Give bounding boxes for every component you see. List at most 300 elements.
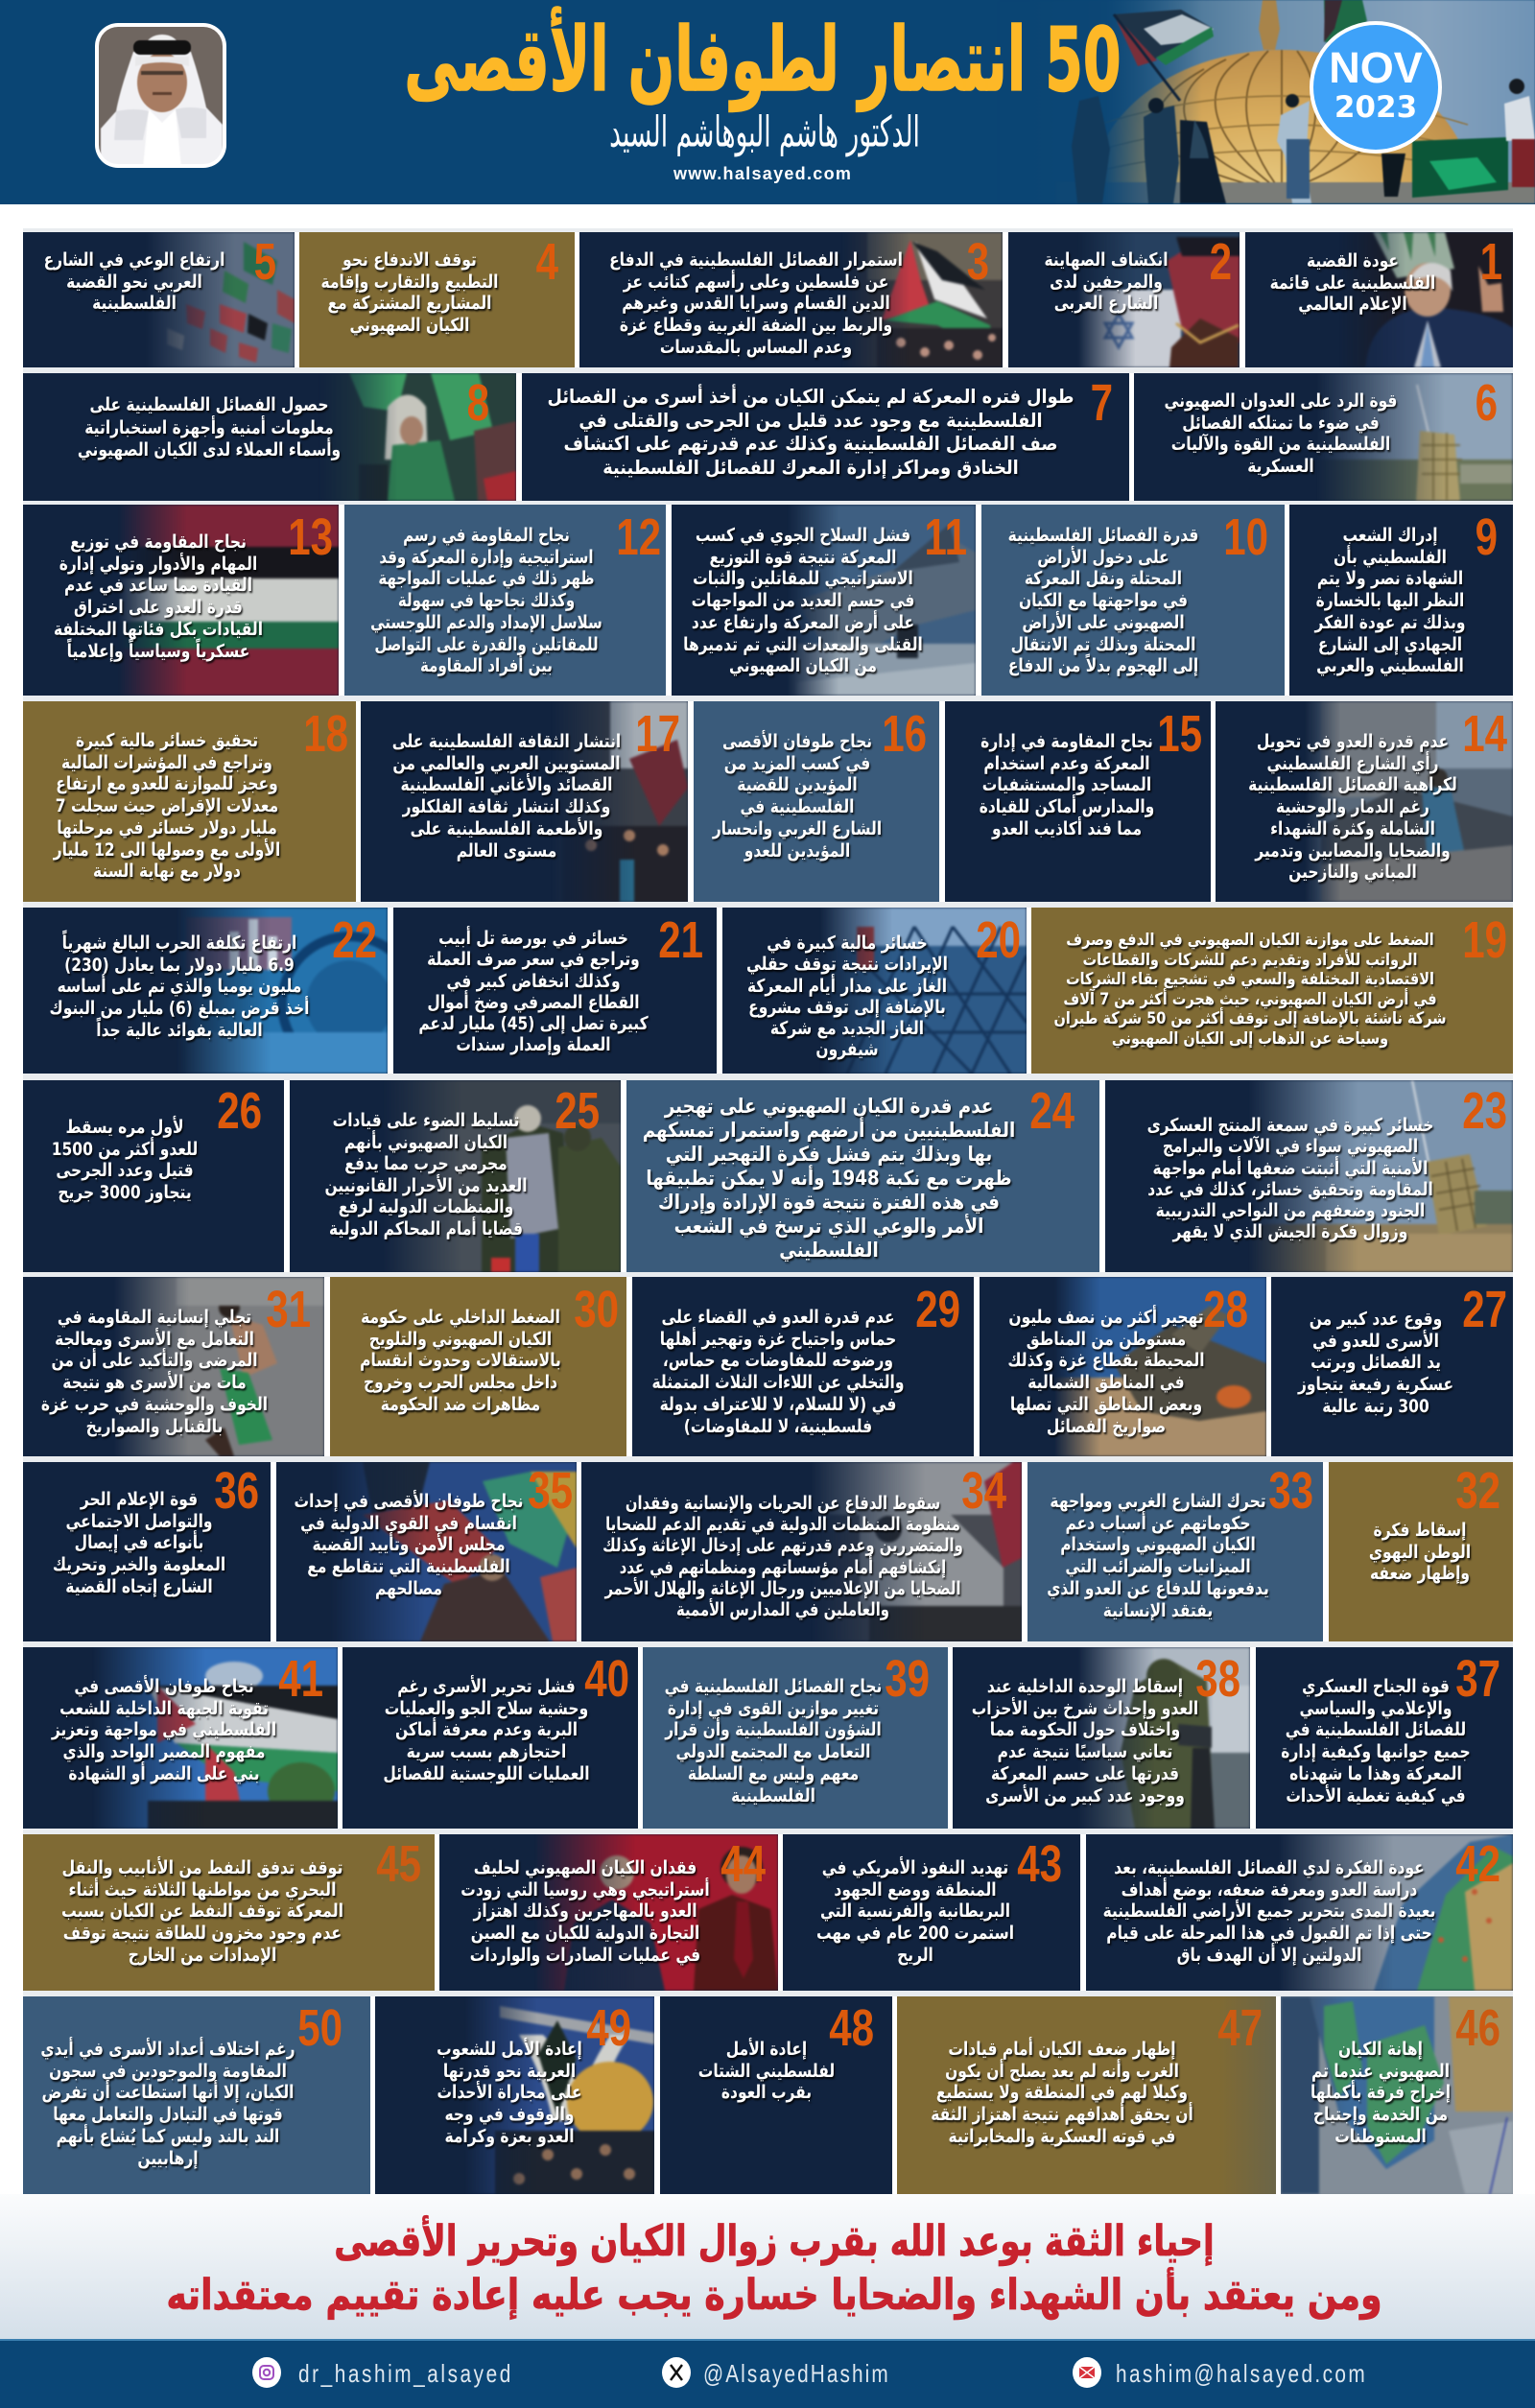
text 35: مجلس الأمن وتأييد القضية bbox=[312, 1534, 506, 1555]
text 20: الإيرادات نتيجة توقف حقلي bbox=[746, 954, 948, 975]
text 14: عدم قدرة العدو في تحويل bbox=[1257, 731, 1449, 752]
icon: mail bbox=[1073, 2357, 1101, 2388]
text 10: على دخول الأراض bbox=[1037, 547, 1169, 568]
text 20: شيفرون bbox=[815, 1039, 879, 1060]
number 40: 40 bbox=[584, 1650, 629, 1708]
text 50: قوتها في التبادل والتعامل معها bbox=[53, 2104, 283, 2125]
text 2: الشارع العربى bbox=[1054, 293, 1158, 314]
card 32 bbox=[1329, 1462, 1513, 1641]
photo: two leaders on red bbox=[439, 1834, 778, 1991]
card 50 bbox=[23, 1996, 370, 2194]
text 34: الضحايا من الإعلاميين ورجال الإغاثة والهلال الأحمر bbox=[604, 1578, 961, 1599]
text 24: في هذه الفترة نتيجة قوة الإرادة وإدراك bbox=[658, 1191, 1000, 1214]
text 26 bbox=[52, 1117, 198, 1204]
card 17 bbox=[361, 701, 688, 902]
text 4: توقف الاندفاع نحو bbox=[342, 249, 477, 271]
text 28: صواريخ الفصائل bbox=[1047, 1416, 1166, 1437]
text 3: والربط بين الضفة الغربية وقطاع غزة bbox=[620, 315, 892, 336]
text 28: مستوطن من المناطق bbox=[1027, 1329, 1186, 1350]
text 12: بين أفراد المقاومة bbox=[420, 655, 553, 676]
text 10: المحتلة وبذلك تم الانتقال bbox=[1011, 634, 1195, 655]
number 50: 50 bbox=[297, 1999, 342, 2057]
text 49: إعادة الأمل للشعوب bbox=[437, 2039, 582, 2060]
card 49 bbox=[375, 1996, 654, 2194]
text 37: المعركة وهذا ما شهدناه bbox=[1289, 1763, 1462, 1784]
text 43: استمرت 200 عام في مهب bbox=[816, 1923, 1014, 1944]
text 49: العدو بعزة وكرامة bbox=[444, 2126, 575, 2147]
number 30: 30 bbox=[574, 1281, 619, 1338]
photo: soldiers and captive bbox=[290, 1080, 621, 1272]
text 8 bbox=[78, 394, 342, 462]
text 31: الخوف والوحشية في حرب غزة bbox=[41, 1394, 268, 1415]
text 6: العسكرية bbox=[1247, 456, 1314, 477]
photo: destroyed buildings bbox=[1309, 701, 1513, 902]
text 39 bbox=[665, 1676, 882, 1806]
text 44: العدو بالمهاجرين وكذلك اهتزاز bbox=[473, 1900, 697, 1922]
text 9: الفلسطيني بأن bbox=[1334, 547, 1447, 568]
text 18 bbox=[54, 730, 280, 883]
number 22: 22 bbox=[332, 911, 377, 969]
text 12 bbox=[370, 525, 603, 679]
text 50: رغم اختلاف أعداد الأسرى في أيدي bbox=[40, 2039, 295, 2060]
photo: crowd with flag bbox=[568, 701, 688, 902]
text 26: للعدو أكثر من 1500 bbox=[52, 1139, 198, 1160]
text 46: المستوطنات bbox=[1334, 2126, 1427, 2147]
text 32: الوطن اليهوي bbox=[1369, 1542, 1471, 1563]
text 9: الشهادة نصر ولا يتم bbox=[1317, 568, 1463, 589]
text 43 bbox=[816, 1857, 1014, 1967]
text 9: الفلسطيني والعربي bbox=[1316, 655, 1464, 676]
text 19: الاقتصادية المختلفة والسعي في تشجيع بقاء الشركات bbox=[1066, 970, 1434, 989]
text 27: الأسرى للعدو في bbox=[1312, 1331, 1439, 1352]
text 9: وبذلك تم عودة الفكر bbox=[1314, 612, 1466, 633]
card 3 bbox=[579, 232, 1003, 367]
text 18: وعجز للموازنة للعدو مع ارتفاع bbox=[56, 773, 278, 794]
text 11: من الكيان الصهيوني bbox=[729, 655, 877, 676]
text 17: والأطعمة الفلسطينية على bbox=[411, 818, 602, 839]
text 36: والتواصل الاجتماعي bbox=[65, 1511, 213, 1532]
card 36 bbox=[23, 1462, 271, 1641]
text 20: الغاز الجديد مع شركة bbox=[770, 1018, 924, 1039]
text 23: المقاومة وتحقيق خسائر، كذلك في عدد bbox=[1147, 1179, 1433, 1200]
closing line 2: ومن يعتقد بأن الشهداء والضحايا خسارة يجب عليه إعادة تقييم معتقداته bbox=[166, 2271, 1382, 2320]
date badge bbox=[1310, 21, 1442, 153]
text 36: قوة الإعلام الحر bbox=[81, 1489, 198, 1510]
number 17: 17 bbox=[635, 705, 680, 763]
instagram handle: dr_hashim_alsayed bbox=[298, 2359, 513, 2388]
text 40 bbox=[383, 1676, 590, 1785]
dome of the rock photo bbox=[1072, 0, 1535, 204]
text 1: عودة القضية bbox=[1307, 250, 1399, 271]
text 14 bbox=[1248, 731, 1458, 885]
text 25: تسليط الضوء على قيادات bbox=[333, 1110, 519, 1131]
text 8: وأسماء العملاء لدى الكيان الصهيوني bbox=[78, 439, 341, 460]
text 41: مفهوم المصير الواحد والذي bbox=[62, 1741, 266, 1762]
text 24: الفلسطيني bbox=[779, 1239, 879, 1262]
number 8: 8 bbox=[467, 374, 489, 432]
text 13: قدرة العدو على اختراق bbox=[74, 597, 243, 618]
number 10: 10 bbox=[1223, 508, 1268, 566]
text 31: بالقنابل والصواريخ bbox=[86, 1416, 223, 1437]
text 29: عدم قدرة العدو في القضاء على bbox=[661, 1307, 895, 1328]
number 25: 25 bbox=[555, 1082, 600, 1140]
text 28: المحيطة بقطاع غزة وكذلك bbox=[1007, 1350, 1205, 1371]
text 39: الفلسطينية bbox=[731, 1785, 815, 1806]
card 5 bbox=[23, 232, 295, 367]
text 30: الضغط الداخلي على حكومة bbox=[361, 1307, 560, 1328]
text 45: توقف تدفق النفط من الأنابيب والنقل bbox=[62, 1857, 342, 1878]
text 13: القيادة مما ساعد في عدم bbox=[64, 575, 252, 596]
card 38 bbox=[953, 1647, 1250, 1829]
photo: missile battery in field bbox=[1105, 1080, 1513, 1272]
text 19: الضغط على موازنة الكيان الصهيوني في الدفع وصرف bbox=[1066, 931, 1434, 950]
text 23: الجنود وضعفهم من النواحي التدريبية bbox=[1156, 1200, 1425, 1221]
number 44: 44 bbox=[720, 1835, 766, 1893]
footer bbox=[0, 2339, 1535, 2408]
text 20: بالإضافة إلى توقف مشروع bbox=[748, 997, 946, 1018]
text 23: خسائر كبيرة في سمعة المنتج العسكرى bbox=[1147, 1115, 1433, 1136]
closing line 1: إحياء الثقة بوعد الله بقرب زوال الكيان وتحرير الأقصى bbox=[334, 2217, 1215, 2266]
text 38: إسقاط الوحدة الداخلية عند bbox=[987, 1676, 1183, 1697]
text 6: قوة الرد على العدوان الصهيوني bbox=[1165, 390, 1397, 412]
text 33: حكوماتهم عن أسباب دعم bbox=[1065, 1513, 1251, 1534]
card 20 bbox=[722, 908, 1027, 1074]
photo: keffiyeh and star flag bbox=[1080, 232, 1240, 367]
text 5: العربي نحو القضية bbox=[66, 271, 202, 293]
number 27: 27 bbox=[1462, 1281, 1507, 1338]
header banner bbox=[0, 0, 1535, 204]
text 4: المشاريع المشتركة مع bbox=[328, 293, 491, 314]
text 10: قدرة الفصائل الفلسطينية bbox=[1008, 525, 1198, 546]
text 38: قدرتها على حسم المعركة bbox=[991, 1763, 1179, 1784]
text 21: القطاع المصرفي وضخ أموال bbox=[427, 992, 640, 1013]
text 47: وكيلا لهم في المنطقة ولا يستطيع bbox=[936, 2082, 1188, 2103]
number 2: 2 bbox=[1210, 233, 1232, 291]
card 18 bbox=[23, 701, 356, 902]
photo: gas platform bbox=[825, 908, 1027, 1074]
text 14: لكراهية الفصائل الفلسطينية bbox=[1248, 774, 1457, 795]
card 35 bbox=[276, 1462, 577, 1641]
text 15: المعركة وعدم استخدام bbox=[983, 753, 1150, 774]
text 7: طوال فتره المعركة لم يتمكن الكيان من أخذ أسرى من الفصائل bbox=[548, 385, 1074, 408]
number 42: 42 bbox=[1455, 1835, 1500, 1893]
photo: Palestinian flag and crowd bbox=[856, 232, 1003, 367]
text 31: التعامل مع الأسرى ومعالجة bbox=[55, 1329, 254, 1350]
text 11: المعركة نتيجة قوة التوزيع bbox=[710, 547, 896, 568]
photo: map of Palestine bbox=[1086, 1834, 1513, 1991]
number 14: 14 bbox=[1462, 705, 1507, 763]
text 27: عسكرية رفيعة يتجاوز bbox=[1298, 1374, 1453, 1395]
photo: ambulance in rubble bbox=[581, 1462, 1022, 1641]
card 46 bbox=[1281, 1996, 1513, 2194]
text 34: منظومة المنظمات الدولية في تقديم الدعم للضحايا bbox=[605, 1514, 960, 1535]
calligraphy signature: الدكتور هاشم البوهاشم السيد bbox=[609, 107, 920, 157]
text 40: احتجازهم بسبب سرية bbox=[407, 1741, 566, 1762]
photo: financial chart bbox=[23, 908, 388, 1074]
text 11: الاستراتيجي للمقاتلين والثبات bbox=[693, 568, 913, 589]
text 45 bbox=[61, 1857, 343, 1967]
text 13: عسكرياً وسياسياً وإعلامياً bbox=[67, 641, 249, 662]
text 9 bbox=[1314, 525, 1466, 679]
text 22: مليون يوميا والذي تم على أساسه bbox=[58, 976, 301, 997]
text 16: في كسب المزيد من bbox=[724, 753, 870, 774]
text 29: ورضوخه للمفاوضات مع حماس، bbox=[663, 1350, 893, 1371]
photo: boy in rubble bbox=[23, 1277, 324, 1456]
text 35: مصالحهم bbox=[375, 1578, 442, 1599]
photo: crowd with green banners bbox=[343, 373, 516, 501]
text 17: وكذلك انتشار ثقافة الفلكلور bbox=[403, 796, 610, 817]
text 12: وكذلك نجاحها في سهولة bbox=[398, 590, 575, 611]
text 40: العمليات اللوجستية للفصائل bbox=[383, 1763, 590, 1784]
card 1 bbox=[1245, 232, 1513, 367]
number 33: 33 bbox=[1268, 1462, 1313, 1520]
text 44: في عمليات الصادرات والواردات bbox=[470, 1945, 700, 1966]
card 33 bbox=[1027, 1462, 1323, 1641]
text 42: حتى إذا تم القبول في هذا المرحلة على قيام bbox=[1106, 1923, 1432, 1944]
text 3: عن فلسطين وعلى رأسهم كتائب عز bbox=[624, 271, 888, 293]
text 40: البرية وعدم معرفة أماكن bbox=[395, 1719, 578, 1740]
text 16: الشارع الغربي وانحسار bbox=[713, 818, 882, 839]
text 43: المنطقة ووضع الجهود bbox=[834, 1879, 997, 1900]
number 7: 7 bbox=[1091, 374, 1113, 432]
card 45 bbox=[23, 1834, 435, 1991]
text 34: إنكشافهم أمام مؤسساتهم ومنظماتهم في عدد bbox=[620, 1557, 946, 1578]
card 21 bbox=[393, 908, 717, 1074]
text 39: التعامل مع المجتمع الدولي bbox=[676, 1741, 870, 1762]
text 39: نجاح الفصائل الفلسطينية في bbox=[665, 1676, 882, 1697]
text 19: في أرض الكيان الصهيوني، حيث هجرت أكثر من 7 آلاف bbox=[1063, 990, 1437, 1009]
number 23: 23 bbox=[1462, 1082, 1507, 1140]
text 21 bbox=[418, 928, 649, 1056]
text 41: تقوية الجبهة الداخلية للشعب bbox=[59, 1698, 269, 1719]
card 26 bbox=[23, 1080, 284, 1272]
text 38: تعاني سياسيًا نتيجة عدم bbox=[998, 1741, 1172, 1762]
text 12: استراتيجية وإدارة المعركة وقد bbox=[379, 547, 594, 568]
number 46: 46 bbox=[1455, 1999, 1500, 2057]
text 7: الفلسطينية مع وجود عدد قليل من الجرحى والقتلى في bbox=[579, 409, 1043, 432]
text 28: وبعض المناطق التي تصلها bbox=[1010, 1394, 1202, 1415]
text 9: النظر اليها بالخسارة bbox=[1316, 590, 1464, 611]
text 19: وسياحة عن الذهاب إلى الكيان الصهيوني bbox=[1112, 1029, 1388, 1049]
text 25: قضايا أمام المحاكم الدولية bbox=[329, 1218, 523, 1239]
text 24 bbox=[643, 1095, 1015, 1263]
number 18: 18 bbox=[303, 705, 348, 763]
text 15: مما فند أكاذيب العدو bbox=[992, 818, 1142, 839]
text 7 bbox=[548, 384, 1074, 482]
card 6 bbox=[1134, 373, 1513, 501]
photo: flags under blue sky bbox=[23, 1647, 338, 1829]
number 37: 37 bbox=[1455, 1650, 1500, 1708]
text 36 bbox=[53, 1489, 225, 1598]
text 11: فشل السلاح الجوي في كسب bbox=[696, 525, 910, 546]
text 10: في مواجهتها مع الكيان bbox=[1019, 590, 1188, 611]
text 21: وتراجع في سعر صرف العملة bbox=[427, 949, 640, 970]
card 9 bbox=[1289, 505, 1513, 696]
text 15 bbox=[980, 731, 1155, 842]
text 29: فلسطينية، لا للمفاوضات) bbox=[684, 1416, 872, 1437]
text 43: البريطانية والفرنسية التي bbox=[820, 1900, 1010, 1922]
text 47: الغرب وأنه لم يعد يصلح أن يكون bbox=[945, 2061, 1179, 2082]
text 33: يفتقد الإنسانية bbox=[1103, 1600, 1213, 1621]
text 31: المرضى والتأكيد على أن من bbox=[51, 1350, 258, 1371]
text 19: شركة ناشئة بالإضافة إلى توقف أكثر من 50 شركة طيران bbox=[1053, 1009, 1447, 1028]
text 13: المهام والأدوار وتولي إدارة bbox=[59, 554, 257, 575]
text 26: لأول مره يسقط bbox=[65, 1117, 184, 1138]
card 41 bbox=[23, 1647, 338, 1829]
text 48: بقرب العودة bbox=[721, 2082, 812, 2103]
text 44: التجارة الدولية للكيان مع الصين bbox=[471, 1923, 699, 1944]
text 6: في ضوء ما تمتلكه الفصائل bbox=[1182, 413, 1380, 434]
number 1: 1 bbox=[1480, 233, 1502, 291]
card 14 bbox=[1216, 701, 1513, 902]
text 18: الأولى مع وصولها الى 12 مليار bbox=[54, 839, 280, 861]
photo: missile battery bbox=[1325, 373, 1513, 501]
title: 50 انتصار لطوفان الأقصى bbox=[404, 9, 1122, 111]
text 21: خسائر في بورصة تل أبيب bbox=[438, 928, 628, 949]
closing statement bbox=[0, 2194, 1535, 2340]
text 37: والإعلامي والسياسي bbox=[1300, 1698, 1452, 1719]
text 33: يدفعونها للدفاع عن العدو الذي bbox=[1047, 1578, 1269, 1599]
text 28: تهجير أكثر من نصف مليون bbox=[1008, 1307, 1204, 1328]
text 38: ووجود عدد كبير من الأسرى bbox=[985, 1785, 1185, 1806]
text 30: بالاستقالات وحدوث انقسام bbox=[360, 1350, 561, 1371]
text 18: دولار مع نهاية السنة bbox=[93, 861, 241, 882]
text 38: واختلاف حول الحكومة مما bbox=[990, 1719, 1180, 1740]
card 12 bbox=[344, 505, 666, 696]
card 7 bbox=[522, 373, 1129, 501]
text 13: القيادات بكل فئاتها المختلفة bbox=[54, 619, 263, 640]
text 44: أستراتيجي وهي روسيا التي زودت bbox=[460, 1879, 710, 1900]
text 35: الفلسطينية التي تتقاطع مع bbox=[307, 1556, 510, 1577]
text 47: أن يحقق أهدافهم نتيجة اهتزاز الثقة bbox=[931, 2104, 1193, 2125]
text 10: المحتلة ونقل المعركة bbox=[1025, 568, 1182, 589]
number 5: 5 bbox=[254, 233, 276, 291]
text 37: جميع جوانبها وكيفية إدارة bbox=[1281, 1741, 1471, 1762]
text 42: بعيدة المدى بتحرير جميع الأراضي الفلسطينية bbox=[1103, 1900, 1435, 1922]
text 12: ظهر ذلك في عمليات المواجهة bbox=[378, 568, 595, 589]
text 30 bbox=[360, 1307, 561, 1416]
text 10: إلى الهجوم بدلاً من الدفاع bbox=[1008, 655, 1198, 676]
text 9: الجهادي إلى الشارع bbox=[1318, 634, 1462, 655]
text 34: والمتضررين وعدم قدرتهم على إدخال الإغاثة وكذلك bbox=[602, 1535, 963, 1556]
text 25 bbox=[324, 1110, 528, 1239]
text 29: في (لا للسلام، لا للاعتراف بدولة bbox=[660, 1394, 896, 1415]
card 37 bbox=[1256, 1647, 1513, 1829]
text 47: إظهار ضعف الكيان أمام قيادات bbox=[948, 2039, 1176, 2060]
text 21: العملة وإصدار سندات bbox=[456, 1034, 611, 1055]
text 45: الإمدادات من الخارج bbox=[129, 1945, 276, 1966]
text 41: بني على النصر أو الشهادة bbox=[68, 1763, 260, 1784]
card 16 bbox=[694, 701, 939, 902]
text 33 bbox=[1047, 1491, 1269, 1621]
text 8: حصول الفصائل الفلسطينية على bbox=[89, 394, 329, 415]
text 35: انقسام في القوى الدولية في bbox=[300, 1513, 517, 1534]
text 30: مظاهرات ضد الحكومة bbox=[381, 1394, 540, 1415]
text 5: ارتفاع الوعي في الشارع bbox=[44, 249, 224, 271]
text 19: الرواتب للأفراد وتقديم دعم للشركات والقطاعات bbox=[1083, 951, 1417, 970]
text 22 bbox=[50, 933, 309, 1042]
text 39: تغيير موازين القوى في إدارة bbox=[668, 1698, 879, 1719]
number 32: 32 bbox=[1455, 1462, 1500, 1520]
text 46: إخراج فرقة بأكملها bbox=[1311, 2082, 1451, 2103]
number 11: 11 bbox=[924, 508, 967, 566]
text 29: حماس واجتياح غزة وتهجير أهلها bbox=[660, 1329, 896, 1350]
text 32: وإظهار ضعفه bbox=[1370, 1563, 1470, 1584]
text 50: الند بالند وليس كما يُشاع بأنهم bbox=[57, 2126, 279, 2147]
icon: X bbox=[662, 2357, 691, 2388]
text 27 bbox=[1298, 1309, 1453, 1418]
card 28 bbox=[980, 1277, 1266, 1456]
card 25 bbox=[290, 1080, 621, 1272]
silhouettes bbox=[1072, 96, 1110, 203]
photo: row of flags bbox=[156, 232, 295, 367]
text 12: للمقاتلين والقدرة على التواصل bbox=[374, 634, 599, 655]
photo: dome with crowd bbox=[375, 1996, 654, 2194]
text 33: الكيان الصهيوني واستخدام bbox=[1060, 1534, 1256, 1555]
text 31: تجلي إنسانية المقاومة في bbox=[58, 1307, 251, 1328]
text 13 bbox=[54, 531, 264, 665]
text 46: من الخدمة وإجتياح bbox=[1313, 2104, 1448, 2125]
card 10 bbox=[981, 505, 1285, 696]
text 23: وزوال فكرة الجيش الذي لا يقهر bbox=[1173, 1221, 1407, 1242]
number 49: 49 bbox=[586, 1999, 631, 2057]
text 29 bbox=[652, 1307, 904, 1437]
text 20 bbox=[746, 933, 948, 1061]
text 18: مليار دولار خسائر في مرحلتها bbox=[57, 817, 277, 838]
text 24: الفلسطينيين من أرضهم واستمرار تمسكهم bbox=[643, 1119, 1015, 1142]
icon: instagram bbox=[252, 2357, 281, 2388]
text 17: مستوى العالم bbox=[457, 840, 556, 862]
text 49: والوقوف في وجه bbox=[444, 2104, 575, 2125]
text 47 bbox=[931, 2039, 1193, 2148]
number 24: 24 bbox=[1029, 1082, 1074, 1140]
number 20: 20 bbox=[976, 911, 1021, 969]
badge year: 2023 bbox=[1334, 90, 1417, 125]
number 6: 6 bbox=[1476, 374, 1498, 432]
text 27: وقوع عدد كبير من bbox=[1310, 1309, 1442, 1330]
text 17: القصائد والأغاني الفلسطينية bbox=[400, 774, 612, 795]
card 11 bbox=[672, 505, 976, 696]
text 49 bbox=[437, 2039, 582, 2148]
text 2: انكشاف الصهاينة bbox=[1044, 249, 1169, 271]
text 41 bbox=[52, 1676, 276, 1785]
text 10 bbox=[1008, 525, 1199, 679]
text 24: بها وبذلك يتم فشل فكرة التهجير التي bbox=[666, 1143, 992, 1166]
number 39: 39 bbox=[885, 1650, 930, 1708]
text 22: 6.9 مليار دولار بما يعادل (230) bbox=[64, 955, 295, 976]
text 37: قوة الجناح العسكري bbox=[1302, 1676, 1450, 1697]
text 18: وتراجع في المؤشرات المالية bbox=[61, 752, 272, 773]
card 39 bbox=[643, 1647, 948, 1829]
number 9: 9 bbox=[1476, 508, 1498, 566]
text 2 bbox=[1044, 249, 1169, 317]
text 46 bbox=[1311, 2039, 1451, 2148]
card 27 bbox=[1271, 1277, 1513, 1456]
text 46: الصهيوني عندما تم bbox=[1311, 2061, 1450, 2082]
text 37 bbox=[1281, 1676, 1471, 1806]
text 15: والمدارس أماكن للقيادة bbox=[980, 796, 1154, 817]
text 44 bbox=[460, 1857, 710, 1967]
text 17: انتشار الثقافة الفلسطينية على bbox=[392, 731, 621, 752]
text 3: الدين القسام وسرايا القدس وغيرهم bbox=[622, 293, 890, 314]
text 35 bbox=[295, 1491, 523, 1600]
number 12: 12 bbox=[616, 508, 661, 566]
text 11 bbox=[683, 525, 924, 679]
portrait bbox=[95, 23, 226, 168]
photo: flag bands bbox=[121, 505, 339, 696]
text 14: والضحايا والمصابين وتدمير bbox=[1255, 840, 1451, 862]
text 25: العديد من الأحرار القانونيين bbox=[324, 1174, 528, 1195]
